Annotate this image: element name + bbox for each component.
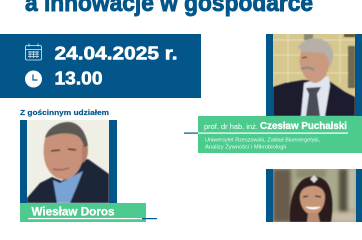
affiliation: Uniwersytet Rzeszowski, Zakład Bioenergetyki, <box>205 138 320 144</box>
name plate <box>20 203 146 222</box>
name plate <box>198 116 362 153</box>
photo frame <box>266 169 362 222</box>
photo: Wiesław Doros <box>27 120 109 203</box>
guest heading: Z gościnnym udziałem <box>20 110 109 117</box>
panel: speaker Czesław Puchalski <box>184 34 362 153</box>
photo frame <box>20 120 117 203</box>
photo frame <box>266 34 362 117</box>
affiliation <box>205 138 320 150</box>
underline <box>198 132 348 134</box>
photo: Czesław Puchalski <box>273 34 355 116</box>
title and name: Czesław Puchalski <box>260 120 347 132</box>
title and name: prof. dr hab. inż. <box>204 122 258 131</box>
time text: 13.00 <box>54 68 102 88</box>
affiliation: Analizy Żywności i Mikrobiologii <box>205 144 286 150</box>
name: Wiesław Doros <box>32 206 115 218</box>
panel: guest Wiesław Doros <box>20 120 157 222</box>
date banner <box>0 34 201 98</box>
icon: calendar <box>26 44 42 60</box>
icon: clock <box>25 70 42 88</box>
date text: 24.04.2025 r. <box>54 42 178 64</box>
name underline <box>28 218 142 219</box>
connector line <box>184 132 198 134</box>
photo: woman <box>273 169 356 222</box>
connector line <box>142 218 157 219</box>
panel: speaker bottom right <box>266 169 362 222</box>
